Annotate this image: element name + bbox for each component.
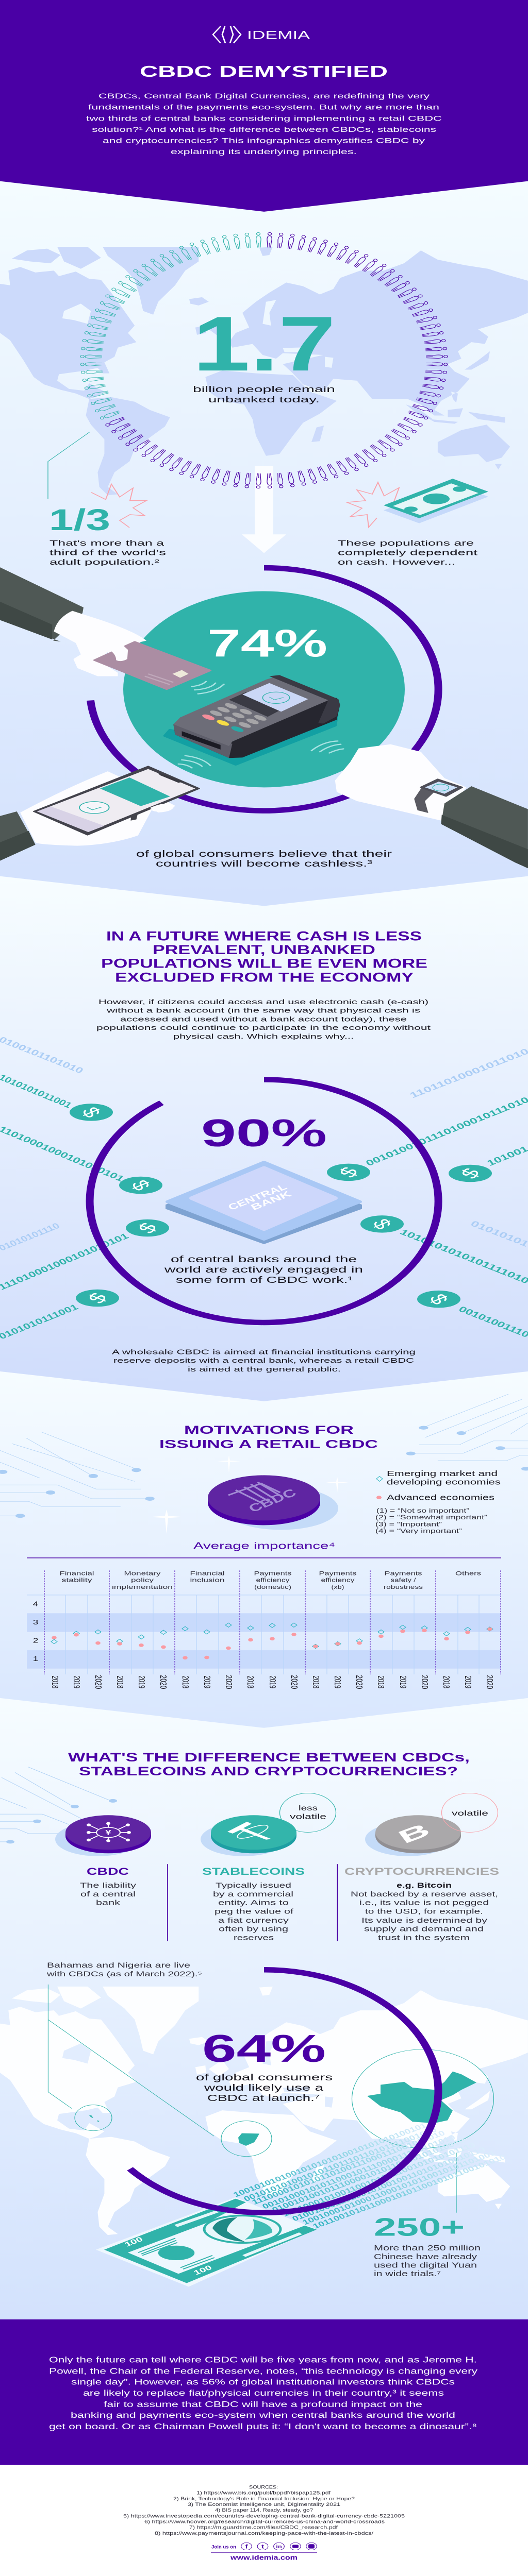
text: Bahamas and Nigeria [46, 1961, 202, 1978]
column: CBDC: CBDC [87, 1866, 129, 1877]
big number 74%: 74% [207, 621, 327, 665]
caption: billion people unbanked: billion people remain [193, 384, 335, 394]
category labels [59, 1570, 481, 1590]
icons: dollar coins: $ [126, 1177, 154, 1194]
column: cryptocurrencies: Not backed by a reserve asset, [351, 1890, 498, 1898]
map callout: Bahamas [75, 2105, 112, 2131]
pink burst left [91, 484, 146, 528]
bubble: volatile [441, 1793, 498, 1832]
closing paragraph [49, 2355, 477, 2431]
big number 1/3: 1/3 [49, 503, 110, 537]
binary stream from banknote: 0010100010101100010111000011100101010 [260, 2133, 457, 2211]
legend: (4) = “Very important” [375, 1528, 462, 1535]
binary streams [0, 1036, 528, 1341]
illustration: large banknote: 100 [123, 2235, 145, 2248]
intro paragraph: explaining its underlying principles. [171, 147, 357, 156]
sources: 4) BIS paper 114, Ready, steady, go? [215, 2508, 313, 2513]
sources [123, 2485, 405, 2536]
world map background [0, 247, 528, 495]
caption: consumers would use CBDC [196, 2072, 333, 2103]
section 1 background [0, 173, 528, 906]
column: CBDC: bank [96, 1899, 120, 1907]
x axis years: 2019 [332, 1676, 342, 1688]
heading: difference between: STABLECOINS AND CRYPTOCURRENCIES? [79, 1765, 458, 1778]
logo: IDEMIA: IDEMIA [247, 28, 310, 41]
category labels: Others [455, 1570, 481, 1577]
icons: dollar coins: $ [424, 1291, 452, 1308]
x axis years: 2018 [375, 1676, 386, 1688]
caption: consumers would use CBDC: CBDC at launch.⁷ [207, 2093, 320, 2103]
text: dependent on cash: These populations are [338, 539, 474, 547]
circuit lines section 4 [0, 1767, 117, 1843]
column: CBDC [80, 1866, 136, 1907]
column: cryptocurrencies: to the USD, for example. [365, 1907, 483, 1916]
category labels: Payments [319, 1570, 357, 1577]
column divider [337, 1864, 338, 1941]
icons: dollar coins [70, 1104, 492, 1308]
legend: Advanced economies [387, 1494, 494, 1502]
text: wholesale vs retail: A wholesale CBDC is aimed at financial institutions carrying [112, 1348, 416, 1356]
sources: 7) https://m.guardtime.com/files/CBDC_research.pdf [189, 2525, 338, 2530]
caption: cashless: of global consumers believe that their [136, 849, 392, 859]
icon: central bank chip [166, 1162, 362, 1244]
pink burst right [347, 482, 399, 527]
caption: central banks engaged [164, 1254, 363, 1285]
text: digital yuan [374, 2244, 481, 2278]
illustration: large banknote [96, 2197, 317, 2286]
sources: 8) https://www.paymentsjournal.com/keeping-pace-with-the-latest-in-cbdcs/ [155, 2531, 374, 2536]
heading: future where cash is less prevalent [101, 929, 427, 985]
heading: motivations [159, 1423, 378, 1450]
binary stream from banknote [232, 2122, 508, 2230]
heading: motivations: MOTIVATIONS FOR [184, 1423, 354, 1436]
icon: central bank chip: BANK [249, 1189, 294, 1212]
closing paragraph: are likely to replace fiat/physical currencies in their country,³ it seems [83, 2388, 444, 2398]
legend: (2) = “Somewhat important” [375, 1515, 487, 1521]
sources: 2) Brink, Technology's Role in Financial Inclusion: Hype or Hope? [173, 2497, 355, 2501]
ring of 100 people: purple [105, 232, 448, 488]
text: wholesale vs retail [112, 1348, 416, 1373]
map callout: Nigeria [221, 2121, 272, 2157]
paragraph: e-cash: accessed and used without a bank account today), these [120, 1015, 407, 1023]
column: cryptocurrencies: i.e., its value is not pegged [359, 1899, 489, 1907]
icon: cryptocurrency coin: B [393, 1820, 435, 1848]
category labels: (domestic) [254, 1584, 291, 1590]
x axis years [50, 1675, 494, 1689]
heading: future where cash is less prevalent: PREVALENT, UNBANKED [153, 942, 375, 957]
icons: dollar coins: $ [335, 1164, 363, 1181]
section 3 background [0, 1366, 528, 1728]
legend [375, 1469, 501, 1535]
paragraph: e-cash: physical cash. Which explains why... [173, 1033, 354, 1040]
paragraph: e-cash: populations could continue to participate in the economy without [96, 1024, 431, 1031]
category labels: Financial [59, 1570, 94, 1577]
heading: future where cash is less prevalent: IN A FUTURE WHERE CASH IS LESS [106, 929, 422, 943]
x axis years: 2020 [158, 1675, 168, 1689]
chart rule [27, 1557, 501, 1558]
column: cryptocurrencies: supply and demand and [364, 1925, 484, 1933]
sources: SOURCES: [249, 2485, 278, 2490]
column: cryptocurrencies: e.g. Bitcoin [397, 1881, 452, 1889]
binary stream from banknote: 0100100011010010100100110101010010110 [290, 2146, 487, 2223]
y axis labels: 2 [33, 1637, 38, 1645]
icon: central bank chip: CENTRAL [226, 1182, 289, 1212]
sources: 5) https://www.investopedia.com/countries-developing-central-bank-digital-currency-cbdc-5221005 [123, 2514, 405, 2519]
column: stablecoins: entity. Aims to [218, 1899, 289, 1907]
caption: consumers would use CBDC: would likely use a [204, 2082, 323, 2093]
column: stablecoins: peg the value of [214, 1907, 293, 1916]
footer rule [211, 2552, 317, 2553]
social links: Join us on [211, 2545, 236, 2550]
binary streams: 111010001000101010101 [0, 1232, 131, 1292]
caption: central banks engaged: some form of CBDC work.¹ [176, 1275, 353, 1285]
intro paragraph: two thirds of central banks considering implementing a retail CBDC [86, 114, 442, 123]
binary streams: 101001 [485, 1144, 528, 1168]
progress ring 90% [90, 1079, 438, 1323]
bubble: volatile: volatile [452, 1809, 488, 1817]
y axis labels: 4 [33, 1600, 38, 1608]
teal leader line [48, 432, 90, 499]
x axis years: 2019 [71, 1676, 81, 1688]
column: stablecoins: Typically issued [216, 1881, 291, 1889]
text: digital yuan: in wide trials.⁷ [374, 2269, 441, 2278]
x axis years: 2019 [267, 1676, 277, 1688]
x axis years: 2019 [398, 1676, 408, 1688]
column: stablecoins: by a commercial [213, 1890, 293, 1898]
social links: f [245, 2544, 248, 2550]
text: digital yuan: Chinese have already [374, 2252, 477, 2261]
column: stablecoins [202, 1866, 305, 1942]
emerging market diamonds [51, 1623, 493, 1649]
sources: 1) https://www.bis.org/publ/bppdf/bispap125.pdf [196, 2490, 331, 2496]
category labels: efficiency [256, 1577, 290, 1583]
big number 90%: 90% [201, 1111, 327, 1155]
world map white [0, 1987, 528, 2235]
advanced economy dots [52, 1628, 492, 1659]
x axis years: 2019 [463, 1676, 473, 1688]
binary stream from banknote: 1101000101001100101011100101010101110 [280, 2141, 477, 2218]
text: digital yuan: More than 250 million [374, 2244, 481, 2252]
binary streams: 0010100101110100010111010 [364, 1095, 528, 1168]
chart title: Average importance⁴ [193, 1540, 335, 1551]
big number 250+: 250+ [374, 2213, 465, 2241]
column: cryptocurrencies: trust in the system [378, 1933, 470, 1942]
column: CBDC: of a central [80, 1890, 136, 1898]
column: stablecoins: STABLECOINS [202, 1866, 305, 1877]
x axis years: 2018 [245, 1676, 255, 1688]
x axis years: 2018 [114, 1676, 125, 1688]
text: dependent on cash: completely dependent [338, 549, 477, 557]
closing paragraph: banking and payments eco-system when central banks around the world [71, 2411, 455, 2420]
x axis years: 2018 [50, 1676, 60, 1688]
social links: in [276, 2545, 282, 2549]
text: Bahamas and Nigeria: Bahamas and Nigeria are live [47, 1961, 190, 1969]
x axis years: 2020 [223, 1675, 234, 1689]
column: stablecoins: a fiat currency [218, 1916, 289, 1924]
heading: future where cash is less prevalent: POPULATIONS WILL BE EVEN MORE [101, 956, 427, 971]
column: cryptocurrencies: Its value is determined by [361, 1916, 487, 1924]
category labels: stability [61, 1577, 92, 1583]
closing paragraph: fair to assume that CBDC will have a profound impact on the [104, 2400, 422, 2409]
legend: developing economies [387, 1478, 501, 1486]
website: www.idemia.com [230, 2554, 298, 2562]
illustration: hand holding card [0, 567, 210, 689]
section 4 background [0, 1689, 528, 2325]
text: wholesale vs retail: is aimed at the general public. [188, 1366, 341, 1373]
paragraph: e-cash: However, if citizens could access and use electronic cash (e-cash) [98, 998, 428, 1006]
footer background [0, 2465, 528, 2576]
social links: t [261, 2544, 265, 2550]
category labels: policy [131, 1577, 154, 1583]
category labels: (xb) [332, 1584, 344, 1590]
big number 1.7: 1.7 [193, 300, 336, 387]
text: Bahamas and Nigeria: with CBDCs (as of March 2022).⁵ [46, 1970, 202, 1978]
binary stream from banknote: 0010101010010101101110110101111001010 [242, 2126, 439, 2203]
caption: cashless: countries will become cashless.³ [156, 858, 372, 869]
title: CBDC DEMYSTIFIED [140, 63, 388, 80]
text: third of adults: adult population.² [50, 558, 159, 566]
binary streams: 11011010001011010 [408, 1047, 528, 1100]
x axis years: 2019 [202, 1676, 212, 1688]
intro paragraph [86, 92, 442, 156]
icon: small banknote [384, 479, 488, 523]
heading: difference between [68, 1751, 470, 1778]
x axis years: 2020 [93, 1675, 103, 1689]
logo: IDEMIA [213, 26, 310, 43]
caption: central banks engaged: of central banks around the [171, 1254, 357, 1264]
y axis labels: 3 [33, 1619, 38, 1626]
category labels: safety / [391, 1577, 416, 1583]
text: wholesale vs retail: reserve deposits with a central bank, whereas a retail CBDC [113, 1357, 414, 1364]
x axis years: 2020 [484, 1675, 494, 1689]
text: third of adults: third of the world's [50, 549, 166, 557]
caption: central banks engaged: world are actively engaged in [164, 1264, 363, 1275]
intro paragraph: solution?¹ And what is the difference between CBDCs, stablecoins [92, 125, 436, 133]
icon: CBDC coin [208, 1475, 338, 1530]
decorative sparkles [150, 1455, 349, 1534]
column: cryptocurrencies: CRYPTOCURRENCIES [344, 1866, 499, 1877]
circuit lines section 3 [0, 1394, 528, 1518]
binary stream from banknote: 1001010101001010101010010101010100101 [232, 2122, 428, 2199]
y axis labels [33, 1600, 38, 1663]
icon: CBDC coin with network [55, 1815, 151, 1856]
category labels: robustness [384, 1584, 423, 1590]
illustration: hand with smart watch [335, 744, 528, 868]
intro paragraph: fundamentals of the payments eco-system. But why are more than [88, 103, 439, 111]
binary streams: 1010101010101111010 [398, 1228, 528, 1285]
ring of 100 people: teal one third [80, 232, 261, 420]
column: cryptocurrencies [344, 1866, 499, 1942]
column: stablecoins: often by using [219, 1925, 288, 1933]
icon: CBDC coin: CBDC [246, 1487, 299, 1515]
binary stream from banknote: 1011001010110001010110010101100101010 [311, 2154, 508, 2230]
legend: (1) = “Not so important” [376, 1507, 469, 1514]
x axis years: 2019 [136, 1676, 146, 1688]
social links [211, 2543, 317, 2550]
big number 64%: 64% [202, 2027, 326, 2070]
column: CBDC: The liability [80, 1881, 136, 1889]
text: digital yuan: used the digital Yuan [374, 2261, 477, 2269]
intro paragraph: CBDCs, Central Bank Digital Currencies, are redefining the very [98, 92, 430, 100]
icons: dollar coins: $ [84, 1290, 112, 1307]
paragraph: e-cash [96, 998, 431, 1040]
category labels: efficiency [321, 1577, 355, 1583]
header banner [0, 0, 528, 212]
x axis years: 2018 [310, 1676, 321, 1688]
category labels: implementation [112, 1584, 173, 1590]
intro paragraph: and cryptocurrencies? This infographics demystifies CBDC by [103, 137, 425, 145]
binary stream from banknote: 1001000101000110001010110010101101001 [301, 2149, 498, 2226]
x axis years: 2020 [289, 1675, 299, 1689]
icon: cryptocurrency coin [365, 1815, 461, 1856]
category labels: Payments [254, 1570, 292, 1577]
teal leader lines [48, 1985, 456, 2213]
icons: dollar coins: $ [134, 1220, 162, 1236]
closing paragraph: get on board. Or as Chairman Powell puts it: “I don't want to become a dinosaur”.⁸ [49, 2422, 477, 2431]
bubble: less volatile: volatile [290, 1812, 326, 1821]
binary streams: 01010101 [468, 1219, 528, 1249]
heading: future where cash is less prevalent: EXCLUDED FROM THE ECONOMY [115, 970, 414, 985]
x axis years: 2020 [354, 1675, 364, 1689]
section 2 background [0, 870, 528, 1401]
bubble: less volatile: less [299, 1804, 318, 1812]
closing banner [0, 2319, 528, 2465]
paragraph: e-cash: without a bank account (in the same way that physical cash is [106, 1007, 420, 1014]
column: stablecoins: reserves [234, 1933, 274, 1942]
closing paragraph: Powell, the Chair of the Federal Reserve, notes, “this technology is changing every [49, 2367, 477, 2376]
binary stream from banknote: 1110000101010110100111000111001010010 [250, 2129, 447, 2206]
teal disc [123, 591, 405, 787]
text: dependent on cash [338, 539, 477, 566]
icons: dollar coins: $ [77, 1104, 105, 1121]
binary stream from banknote: 0100101001011100001010110100101010010 [270, 2137, 467, 2214]
category labels: inclusion [190, 1577, 225, 1583]
x axis years: 2018 [180, 1676, 190, 1688]
category labels: Monetary [124, 1570, 161, 1577]
map callout: China [352, 2049, 494, 2148]
caption: consumers would use CBDC: of global consumers [196, 2072, 333, 2082]
heading: motivations: ISSUING A RETAIL CBDC [159, 1437, 378, 1450]
x axis years: 2020 [419, 1675, 430, 1689]
illustration: large banknote: 100 [192, 2264, 214, 2277]
icon: stablecoin coin [201, 1815, 296, 1856]
progress ring 64% [130, 1970, 438, 2213]
sources: 6) https://www.hoover.org/research/digital-currencies-us-china-and-world-crossroads [144, 2519, 385, 2524]
icon: CBDC coin with network: ¥ [105, 1828, 111, 1837]
dot chart: average importance [27, 1570, 501, 1689]
text: third of adults: That's more than a [50, 539, 164, 547]
category labels: Payments [385, 1570, 422, 1577]
caption: billion people unbanked: unbanked today. [208, 395, 320, 404]
y axis labels: 1 [33, 1655, 38, 1663]
caption: billion people unbanked [193, 384, 335, 404]
binary streams: 00101001110 [456, 1305, 528, 1340]
text: dependent on cash: on cash. However... [338, 558, 455, 566]
legend: Emerging market and [387, 1469, 498, 1478]
bubble: less volatile [279, 1793, 336, 1832]
illustration: payment terminal [165, 675, 343, 768]
closing paragraph: Only the future can tell where CBDC will be five years from now, and as Jerome H. [49, 2355, 477, 2365]
sources: 3) The Economist intelligence unit, Digimentality 2021 [188, 2502, 340, 2507]
text: third of adults [50, 539, 166, 566]
icons: dollar coins: $ [457, 1165, 485, 1182]
legend: (3) = “Important” [375, 1521, 442, 1528]
illustration: hand holding phone [0, 766, 200, 861]
x axis years: 2018 [441, 1676, 451, 1688]
caption: cashless [136, 849, 392, 869]
arrow pointing down [242, 466, 286, 553]
closing paragraph: single day”. However, as 56% of global institutional investors think CBDCs [71, 2378, 455, 2387]
progress ring 74% [91, 568, 438, 811]
heading: difference between: WHAT'S THE DIFFERENCE BETWEEN CBDCs, [68, 1751, 470, 1765]
column divider [167, 1864, 168, 1941]
category labels: Financial [190, 1570, 225, 1577]
icons: dollar coins: $ [368, 1216, 395, 1232]
